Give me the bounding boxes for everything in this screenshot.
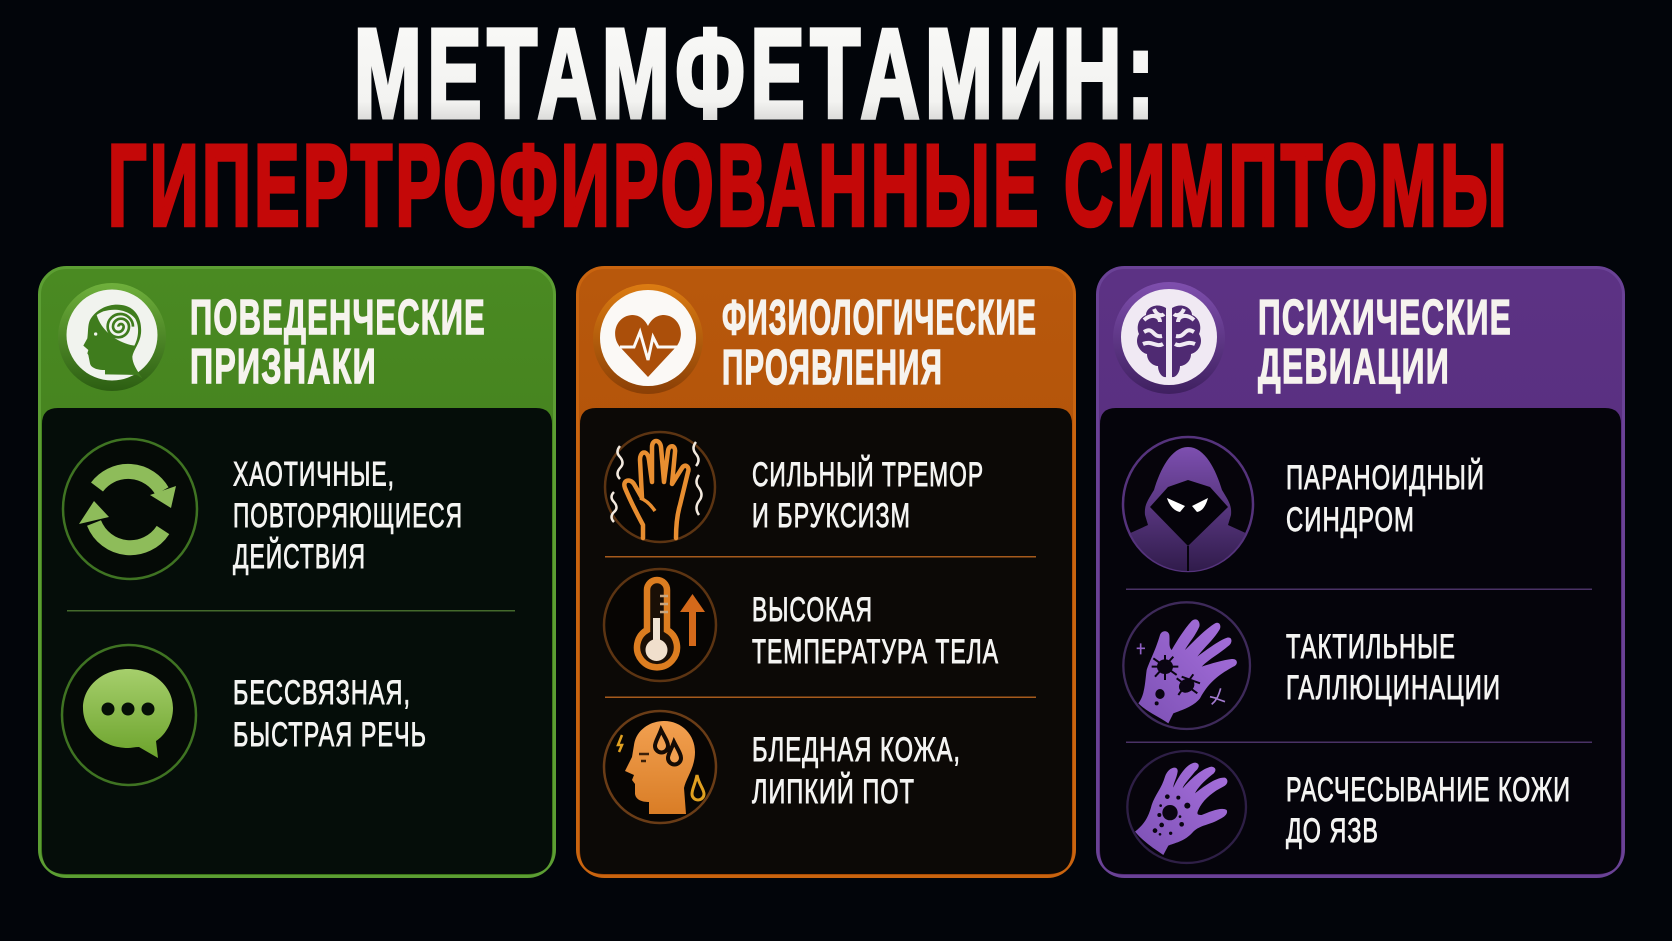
item: pale skin and sweat (604, 711, 961, 823)
item: repetitive actions (63, 439, 463, 579)
panel frame: purple (1098, 268, 1624, 876)
text: high temperature (752, 591, 999, 671)
icon: thermometer (604, 569, 716, 681)
text: incoherent speech: БЕССВЯЗНАЯ, (233, 674, 411, 712)
panel frame: green (40, 268, 554, 876)
item: skin scratching (1127, 751, 1571, 863)
text: repetitive actions: ПОВТОРЯЮЩИЕСЯ (233, 497, 463, 535)
heading: physiological: ФИЗИОЛОГИЧЕСКИЕ (722, 291, 1037, 345)
icon: heart with pulse (593, 284, 703, 394)
item: tactile hallucinations (1123, 602, 1501, 729)
panel: behavioural signs (40, 268, 554, 876)
icon: hooded figure (1123, 437, 1253, 575)
panel body: orange (580, 408, 1072, 874)
title (108, 3, 1510, 250)
item: paranoid syndrome (1123, 437, 1485, 575)
text: incoherent speech (233, 674, 427, 754)
text: tremor: И БРУКСИЗМ (752, 497, 911, 535)
heading: mental: ПСИХИЧЕСКИЕ (1258, 291, 1512, 345)
panel: mental deviations (1098, 268, 1624, 876)
heading: behavioural (190, 291, 486, 394)
panel frame: orange (578, 268, 1074, 876)
text: high temperature: ВЫСОКАЯ (752, 591, 873, 629)
text: paranoid syndrome: ПАРАНОИДНЫЙ (1286, 457, 1485, 497)
icon: cycle arrows (63, 439, 197, 579)
text: tactile hallucinations: ГАЛЛЮЦИНАЦИИ (1286, 669, 1501, 707)
icon: sweating head (604, 711, 716, 823)
heading: behavioural: ПОВЕДЕНЧЕСКИЕ (190, 291, 486, 345)
heading: mental: ДЕВИАЦИИ (1258, 340, 1450, 394)
panel body: green (42, 408, 552, 874)
panel: physiological manifestations (578, 268, 1074, 876)
icon: hand with sores (1127, 751, 1246, 863)
text: skin scratching (1286, 771, 1571, 850)
heading: physiological: ПРОЯВЛЕНИЯ (722, 341, 943, 395)
item: incoherent speech (62, 645, 427, 785)
item: tremor (605, 432, 984, 542)
icon: brain (1113, 282, 1225, 394)
icon: head with spiral (58, 283, 166, 391)
icon: speech bubble (62, 645, 196, 785)
text: tremor: СИЛЬНЫЙ ТРЕМОР (752, 454, 984, 494)
text: high temperature: ТЕМПЕРАТУРА ТЕЛА (752, 633, 999, 671)
icon: hand with bugs (1123, 602, 1250, 729)
text: tremor (752, 454, 984, 535)
text: repetitive actions: ДЕЙСТВИЯ (233, 536, 366, 576)
text: tactile hallucinations: ТАКТИЛЬНЫЕ (1286, 628, 1456, 666)
panel body: purple (1100, 408, 1621, 874)
text: tactile hallucinations (1286, 628, 1501, 707)
text: repetitive actions: ХАОТИЧНЫЕ, (233, 456, 395, 494)
text: pale skin and sweat (752, 731, 961, 811)
title line: white: МЕТАМФЕТАМИН: (354, 3, 1160, 144)
text: repetitive actions (233, 456, 463, 576)
heading: behavioural: ПРИЗНАКИ (190, 340, 377, 394)
icon: shaking hand (605, 432, 715, 542)
heading: physiological (722, 291, 1037, 395)
text: paranoid syndrome (1286, 457, 1485, 539)
item: high temperature (604, 569, 999, 681)
text: paranoid syndrome: СИНДРОМ (1286, 501, 1415, 539)
text: incoherent speech: БЫСТРАЯ РЕЧЬ (233, 716, 427, 754)
heading: mental (1258, 291, 1512, 394)
text: skin scratching: ДО ЯЗВ (1286, 812, 1379, 850)
text: pale skin and sweat: ЛИПКИЙ ПОТ (752, 771, 915, 811)
text: pale skin and sweat: БЛЕДНАЯ КОЖА, (752, 731, 961, 769)
